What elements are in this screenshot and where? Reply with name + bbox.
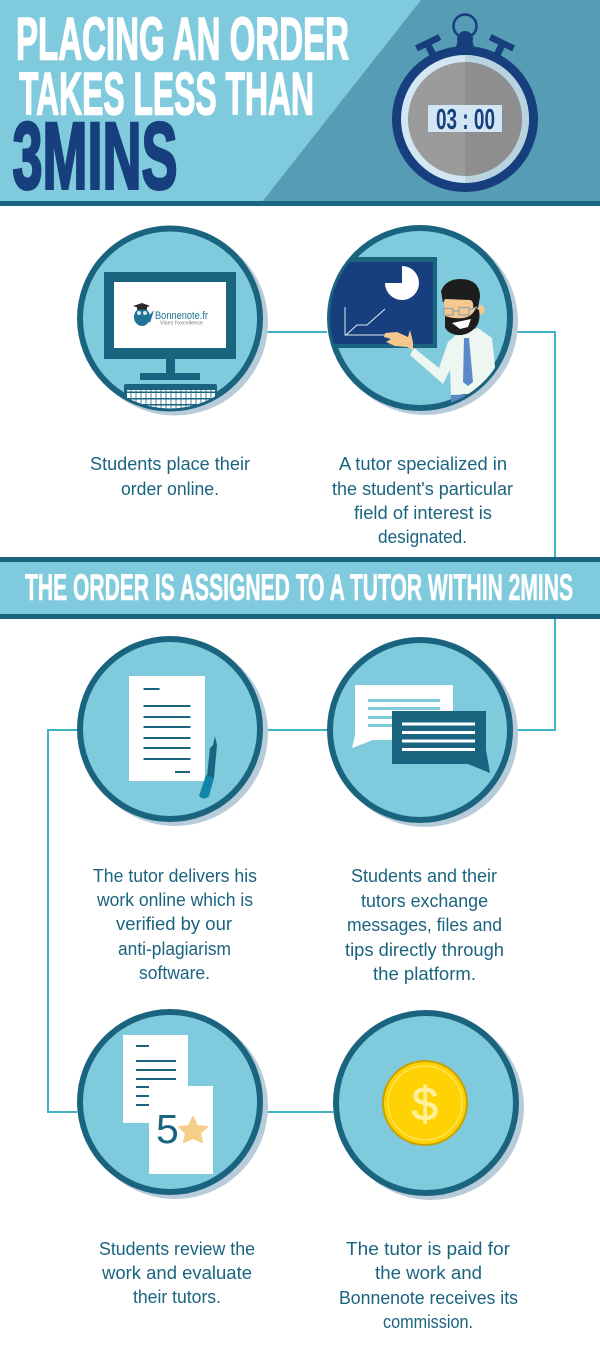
text: step 4: Students and their: [351, 866, 497, 886]
text: step 5: Students review the: [99, 1239, 255, 1259]
text: step 3: work online which is: [96, 890, 253, 910]
text: step 3: anti-plagiarism: [118, 939, 231, 959]
title: [12, 6, 349, 210]
text: step 2: the student's particular: [332, 479, 513, 499]
text: step 6: The tutor is paid for: [346, 1239, 510, 1259]
text: step 5: their tutors.: [133, 1287, 221, 1307]
panel: step 6 payment: [336, 1013, 524, 1200]
text: step 4: [345, 866, 504, 984]
man: [384, 279, 495, 403]
text: step 4: tutors exchange: [361, 891, 488, 911]
text: step 6: [339, 1239, 518, 1332]
logo: Visez l'excellence: [160, 320, 203, 326]
icon: stopwatch: [392, 14, 538, 192]
panel: step 1 order online: [80, 228, 268, 416]
icon: tutor at board: [320, 257, 495, 403]
text: step 2: field of interest is: [354, 503, 492, 523]
panel: step 3 work delivered: [80, 639, 268, 826]
text: step 1: order online.: [121, 479, 219, 499]
panel: step 5 review: [80, 1012, 268, 1199]
icon: computer: [104, 272, 236, 414]
title: 3MINS: [12, 104, 178, 210]
text: step 1: [90, 454, 250, 499]
text: step 6: Bonnenote receives its: [339, 1288, 518, 1308]
panel: step 4 messaging: [330, 640, 518, 827]
text: step 3: [93, 866, 257, 983]
text: step 5: [99, 1239, 255, 1307]
icon: speech bubbles: [352, 685, 490, 773]
logo: [133, 303, 208, 326]
panel: step 2 tutor designated: [320, 228, 518, 415]
icon: reviewed documents: 5: [156, 1106, 179, 1152]
title: TAKES LESS THAN: [19, 60, 314, 128]
text: step 4: the platform.: [373, 964, 476, 984]
header banner: [0, 0, 600, 210]
icon: dollar coin: [382, 1060, 468, 1146]
text: step 4: tips directly through: [345, 940, 504, 960]
connector lines: [48, 332, 555, 1112]
text: step 5: work and evaluate: [101, 1263, 252, 1283]
icon: reviewed documents: [123, 1035, 213, 1174]
icon: dollar coin: $: [412, 1077, 438, 1130]
text: step 2: A tutor specialized in: [339, 454, 507, 474]
text: step 3: verified by our: [116, 914, 232, 934]
text: step 2: designated.: [378, 527, 467, 547]
text: step 3: software.: [139, 963, 210, 983]
text: step 1: Students place their: [90, 454, 250, 474]
logo: Bonnenote.fr: [155, 310, 208, 322]
text: step 4: messages, files and: [347, 915, 502, 935]
icon: stopwatch: 03 : 00: [436, 104, 495, 136]
text: step 2: [332, 454, 513, 547]
text: step 3: The tutor delivers his: [93, 866, 257, 886]
icon: document and pen: [129, 676, 217, 798]
text: step 6: commission.: [383, 1312, 473, 1332]
banner: order assigned within 2 mins: [0, 557, 600, 619]
text: step 6: the work and: [375, 1263, 482, 1283]
